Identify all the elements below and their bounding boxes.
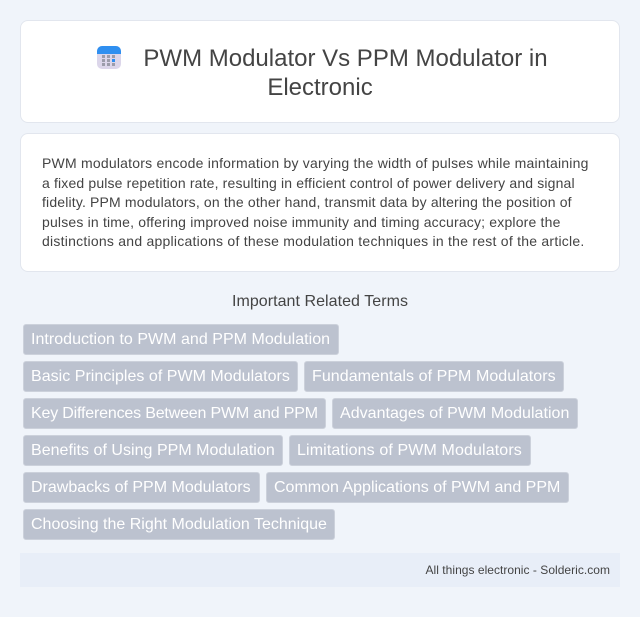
- tag: Key Differences Between PWM and PPM: [31, 405, 318, 422]
- tag: [289, 435, 531, 466]
- tag: Choosing the Right Modulation Technique: [31, 516, 327, 533]
- tag: Common Applications of PWM and PPM: [274, 479, 560, 496]
- section heading: Important Related Terms: [232, 293, 408, 310]
- tag: [23, 472, 260, 503]
- intro paragraph: fidelity. PPM modulators, on the other hand, transmit data by altering the position of: [42, 194, 572, 210]
- tag: Advantages of PWM Modulation: [340, 405, 569, 422]
- tag: [23, 324, 339, 355]
- tag: Limitations of PWM Modulators: [297, 442, 522, 459]
- title: [143, 45, 548, 101]
- tag: [23, 435, 283, 466]
- intro paragraph: a fixed pulse repetition rate, resulting in efficient control of power delivery and signal: [42, 174, 575, 190]
- tag: [304, 361, 564, 392]
- title: Electronic: [267, 74, 373, 101]
- tag: [23, 361, 298, 392]
- intro paragraph: [42, 155, 589, 249]
- header panel: [20, 20, 620, 123]
- tag: Basic Principles of PWM Modulators: [31, 368, 290, 385]
- intro paragraph: distinctions and applications of these modulation techniques in the rest of the article.: [42, 233, 585, 249]
- tag: [266, 472, 569, 503]
- icon: calendar: [97, 46, 121, 69]
- title: PWM Modulator Vs PPM Modulator in: [143, 45, 548, 72]
- footer credit: All things electronic - Solderic.com: [426, 563, 610, 577]
- tag: [23, 509, 335, 540]
- tag: Fundamentals of PPM Modulators: [312, 368, 556, 385]
- tag: [332, 398, 578, 429]
- related terms tags: [23, 324, 578, 540]
- tag: Benefits of Using PPM Modulation: [31, 442, 275, 459]
- footer bar: [20, 553, 620, 587]
- tag: Introduction to PWM and PPM Modulation: [31, 331, 330, 348]
- tag: Drawbacks of PPM Modulators: [31, 479, 251, 496]
- intro text panel: [20, 133, 620, 272]
- tag: [23, 398, 326, 429]
- intro paragraph: PWM modulators encode information by varying the width of pulses while maintaining: [42, 155, 589, 171]
- intro paragraph: pulses in time, offering improved noise immunity and timing accuracy; explore the: [42, 214, 561, 230]
